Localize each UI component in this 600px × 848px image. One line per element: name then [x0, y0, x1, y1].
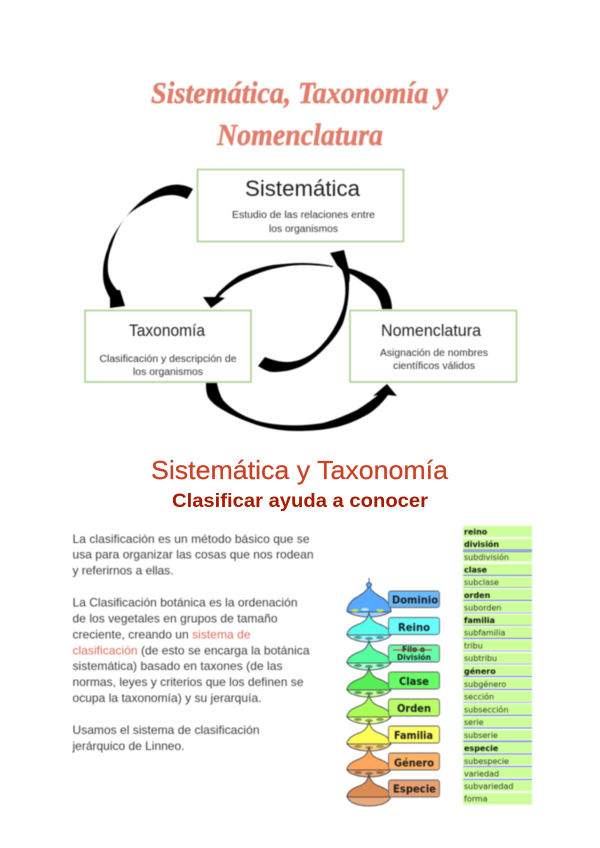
box: Nomenclatura [350, 310, 516, 382]
cycle diagram [85, 170, 516, 431]
text block: botanical classification [72, 596, 310, 705]
bell: Clase [347, 668, 391, 697]
box: Taxonomía: Clasificación y descripción de [100, 354, 237, 365]
taxonomic rank table: orden [464, 591, 491, 600]
label: Familia [388, 726, 440, 743]
arrow: Nomenclatura to Sistemática [347, 268, 392, 309]
text block: botanical classification: normas, leyes y criterios que los definen se [72, 675, 304, 689]
bell: Dominio [347, 578, 391, 617]
label: Dominio: Dominio [392, 594, 438, 606]
taxonomic rank table: forma [464, 794, 488, 804]
label: Dominio [388, 591, 440, 608]
taxonomic rank table: subespecie [464, 757, 509, 766]
label: Clase [388, 672, 440, 689]
text block: definition: y referirnos a ellas. [72, 564, 174, 578]
label: Familia: Familia [394, 730, 433, 742]
text block: definition [72, 532, 314, 578]
text block: Linnaeus: Usamos el sistema de clasificación [72, 723, 260, 737]
box: Nomenclatura: Asignación de nombres [380, 348, 488, 359]
taxonomic rank table: subdivisión [464, 552, 509, 562]
box: Taxonomía: los organismos [133, 367, 203, 378]
text block: botanical classification: de los vegetales en grupos de tamaño [72, 612, 278, 626]
bell: Familia [347, 722, 391, 751]
text block: Linnaeus [72, 723, 260, 753]
box: Sistemática [198, 170, 404, 242]
text block: botanical classification: La Clasificación botánica es la ordenación [72, 596, 298, 610]
bell: Orden [347, 695, 391, 724]
arrow: Sistemática to Taxonomía [103, 185, 193, 308]
taxonomic rank table: reino [464, 528, 488, 536]
text block: definition: usa para organizar las cosas que nos rodean [72, 548, 314, 562]
title: Sistemática, Taxonomía y [151, 75, 448, 110]
taxonomic rank table: tribu [464, 642, 483, 650]
arrow: Sistemática to Taxonomía lower [203, 263, 333, 308]
title [151, 75, 448, 152]
label: Clase: Clase [399, 676, 429, 688]
label: Orden [388, 699, 440, 716]
label: Género [388, 753, 440, 770]
taxonomic rank table: subsección [464, 704, 508, 714]
taxonomic rank table: división [464, 539, 499, 549]
label: Filo o División [388, 645, 440, 662]
label: Reino: Reino [398, 622, 430, 634]
taxonomic rank table: subclase [464, 578, 499, 587]
heading: Sistemática y Taxonomía: Sistemática y Taxonomía [151, 455, 449, 485]
box: Sistemática: los organismos [269, 224, 338, 235]
bell: Género [347, 748, 391, 777]
box: Taxonomía [85, 310, 251, 382]
text block: botanical classification: ocupa la taxonomía) y su jerarquía. [72, 691, 262, 705]
taxonomic rank table: serie [464, 718, 484, 727]
arrow: Taxonomía to Sistemática [258, 250, 350, 372]
taxonomic rank table: familia [464, 616, 495, 625]
box: Nomenclatura: científicos válidos [393, 361, 475, 372]
label: Especie: Especie [393, 784, 436, 796]
label: Reino [388, 618, 440, 634]
bell: Filo o División [347, 641, 391, 670]
box: Sistemática: Sistemática [245, 176, 361, 201]
box: Nomenclatura: Nomenclatura [381, 321, 482, 340]
taxonomic rank table: especie [464, 744, 499, 753]
taxonomic rank table: subserie [464, 731, 498, 740]
subheading: Clasificar ayuda a conocer: Clasificar ayuda a conocer [172, 490, 428, 512]
taxonomic rank table: subtribu [464, 654, 497, 663]
taxonomic hierarchy bells [347, 578, 440, 806]
box: Taxonomía: Taxonomía [129, 321, 205, 340]
taxonomic rank table: subvariedad [464, 782, 513, 791]
taxonomic rank table [463, 526, 532, 804]
taxonomic rank table: género [464, 666, 496, 676]
bell: Reino [347, 613, 391, 642]
box: Sistemática: Estudio de las relaciones entre [232, 210, 375, 221]
text block: botanical classification: clasificación (de esto se encarga la botánica [72, 644, 310, 658]
label: Orden: Orden [397, 703, 431, 715]
taxonomic rank table: subfamilia [464, 628, 505, 638]
bell: Especie [347, 775, 391, 806]
arrow: Taxonomía to Nomenclatura [206, 383, 397, 431]
text block: botanical classification: sistemática) basado en taxones (de las [72, 659, 282, 673]
taxonomic rank table: subgénero [464, 679, 506, 689]
label: Género: Género [394, 758, 434, 770]
title: Nomenclatura [216, 117, 383, 152]
text block: Linnaeus: jerárquico de Linneo. [72, 739, 184, 753]
text block: definition: La clasificación es un método básico que se [72, 532, 310, 546]
text block: botanical classification: creciente, creando un sistema de [72, 628, 251, 642]
taxonomic rank table: sección [464, 692, 494, 702]
taxonomic rank table: clase [464, 566, 488, 574]
label: Especie [388, 780, 440, 797]
label: Filo o División: Filo o [402, 645, 425, 654]
taxonomic rank table: suborden [464, 604, 501, 612]
taxonomic rank table: variedad [464, 770, 499, 778]
label: Filo o División: División [397, 653, 431, 662]
